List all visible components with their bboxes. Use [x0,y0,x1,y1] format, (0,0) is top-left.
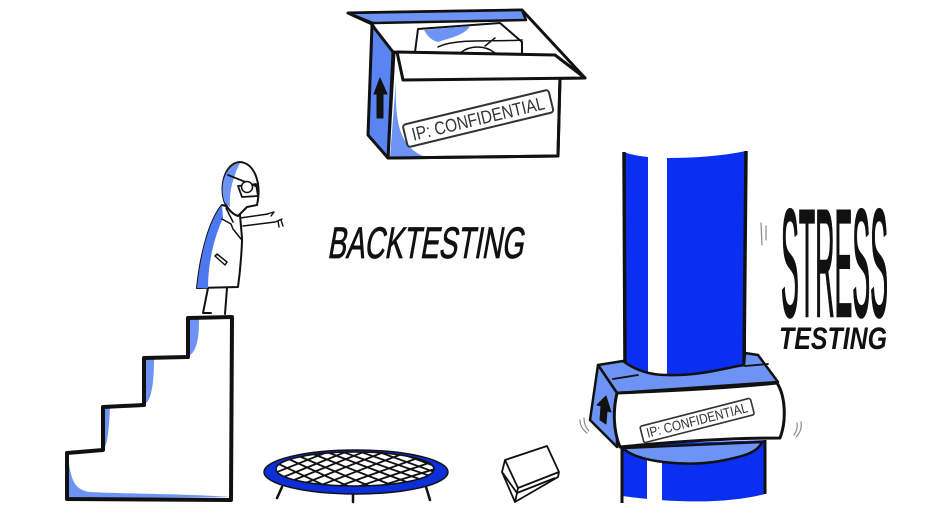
item inside box [415,23,522,54]
confidential label: IP: CONFIDENTIAL [410,92,547,145]
stair shading [68,319,230,499]
staircase [67,317,232,500]
vibration marks [580,223,801,437]
goggles [228,175,258,197]
box front [388,52,560,158]
heading: backtesting: BACKTESTING [325,218,530,268]
back flap [348,10,585,80]
underside [623,442,762,464]
arms and hands [240,212,283,227]
scientist figure [197,162,283,314]
upper column section [623,151,746,375]
legs [203,288,227,314]
front panel [614,383,784,447]
net mesh [278,452,434,486]
head blue shading [223,163,240,207]
heading: stress: STRESS [781,177,888,349]
coat blue shading [197,205,223,288]
small fallen box [502,446,559,502]
clamped confidential box [590,353,784,464]
blue strip on back flap [348,10,526,23]
open confidential box [348,10,585,158]
top flaps [598,353,778,393]
coat collar and pocket [215,208,241,265]
lab coat [197,205,242,288]
box front blue shading [390,80,423,157]
box side with arrow [368,25,393,158]
heading: testing: TESTING [779,321,887,356]
lower column section [622,440,765,504]
trampoline [264,450,448,502]
head [223,162,258,216]
side panel with arrow [590,365,617,447]
clamped box label: IP: CONFIDENTIAL [645,400,749,441]
front flap [397,52,585,80]
